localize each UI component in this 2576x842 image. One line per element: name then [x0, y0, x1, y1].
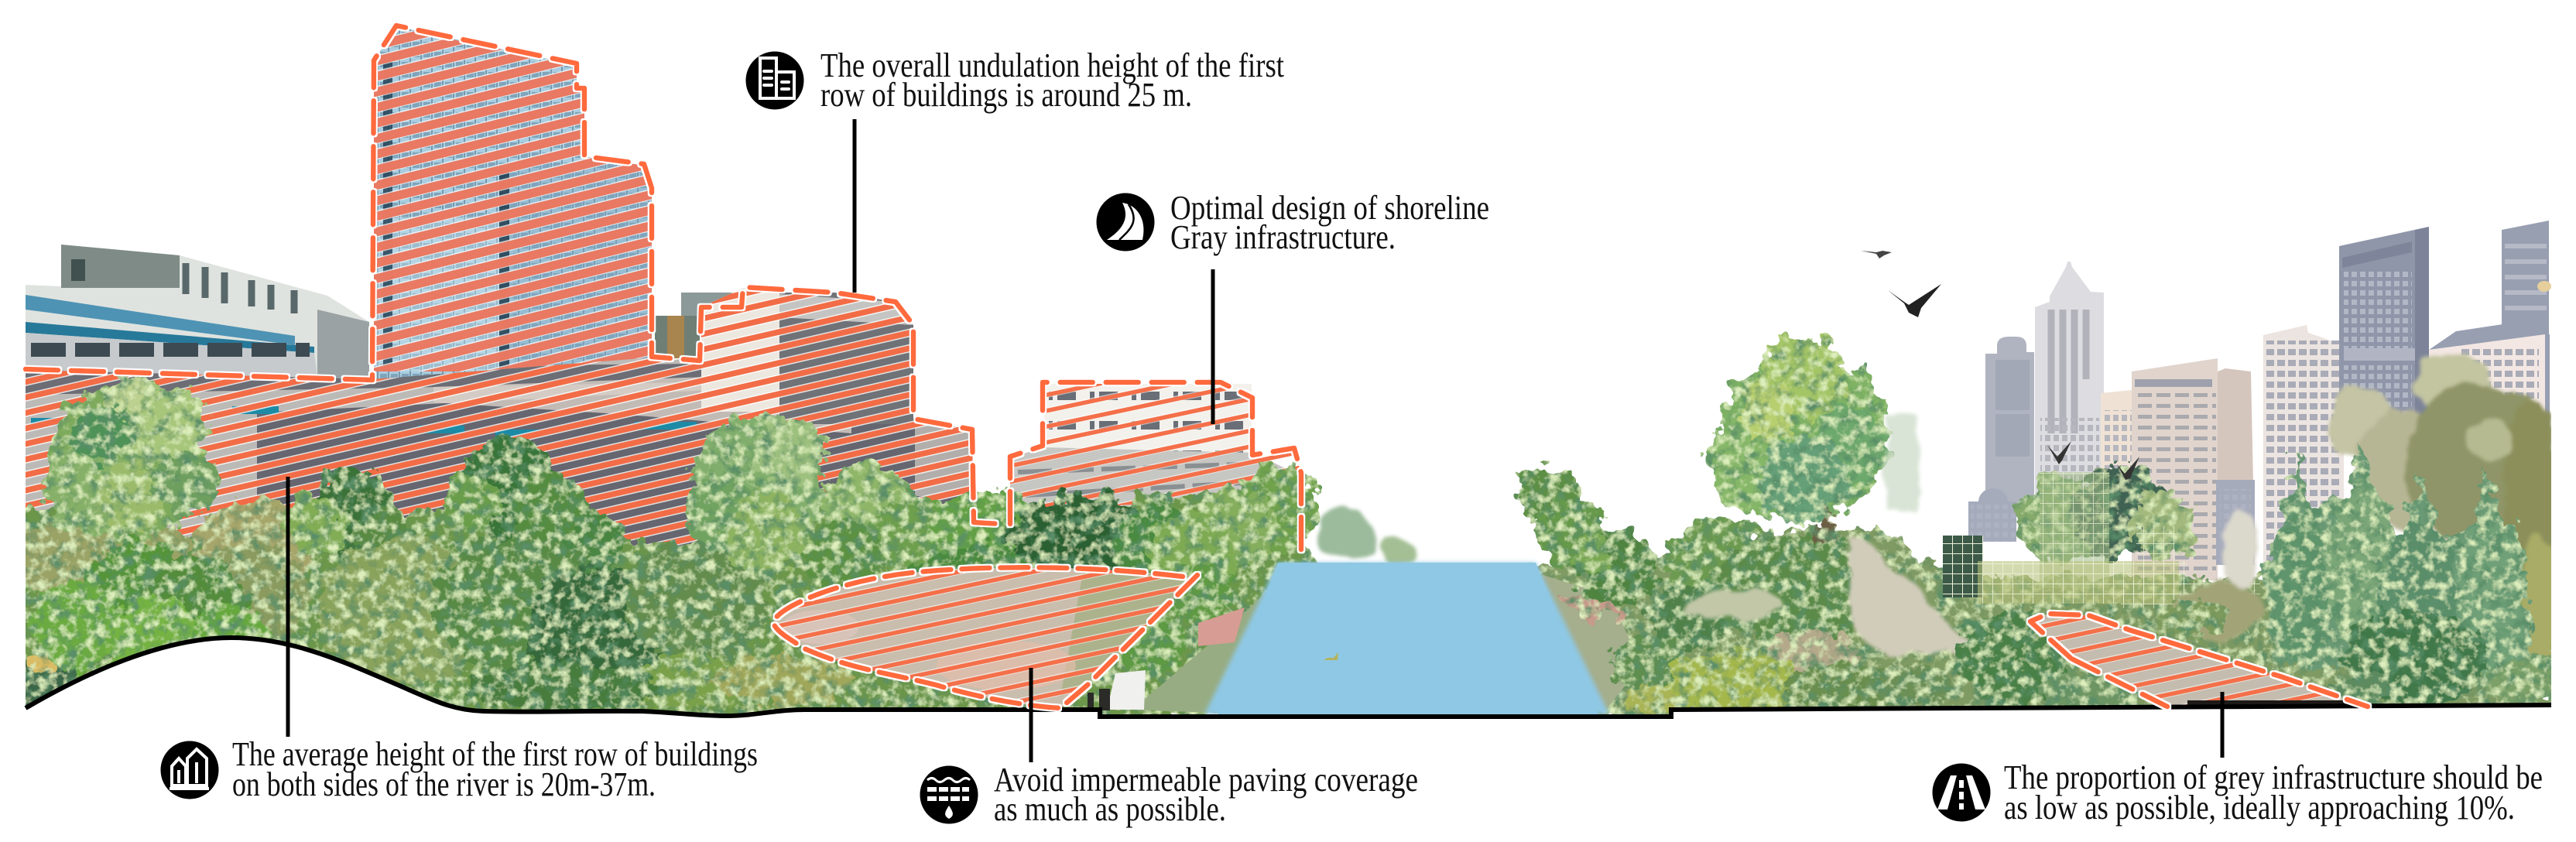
icon: bird in front of buildings 1 [2047, 441, 2071, 464]
text: shoreline line 2: Gray infrastructure. [1170, 218, 1396, 256]
building: beige slab [2132, 358, 2253, 580]
rock: pale blobs [2221, 512, 2261, 587]
right bank ground planting [1529, 526, 2551, 720]
small background building behind the tower [655, 293, 742, 358]
text: undulation height line 2: row of buildings is around 25 m. [820, 76, 1192, 114]
building: far right tower [2502, 221, 2549, 341]
tree: large tree [1707, 336, 1889, 546]
text: average height line 2: on both sides of the river is 20m-37m. [232, 765, 656, 803]
outline: paving [773, 567, 1198, 708]
building: white stepped tower [2263, 325, 2344, 565]
building: roofed block [2429, 317, 2550, 481]
icon: permeable paving [920, 766, 978, 823]
callout: undulation height [746, 46, 1284, 114]
icon: shoreline [1096, 193, 1155, 251]
bush: right bank planting [1613, 519, 1896, 717]
text: undulation height: The overall undulation height of the first [820, 46, 1284, 84]
river [1204, 563, 1609, 717]
text: shoreline: Optimal design of shoreline [1170, 189, 1489, 227]
left background building [26, 245, 369, 379]
tree: pale ghosted edge [1687, 351, 2562, 697]
tree: pine mass [2264, 445, 2533, 681]
text: impermeable paving: Avoid impermeable paving coverage [994, 761, 1418, 799]
text: impermeable paving line 2: as much as possible. [994, 790, 1226, 828]
paving area with hatch [773, 567, 1198, 710]
distant city skyline [1968, 221, 2551, 580]
tower with hatch [374, 29, 652, 379]
ground line [26, 638, 2551, 717]
bush: front lower left [17, 538, 271, 718]
icon: two buildings [161, 741, 218, 799]
icon: road [1932, 763, 1991, 822]
tree: olive canopy [2328, 351, 2562, 697]
callout: average height [161, 735, 758, 803]
bush: mid-right group [906, 486, 1181, 573]
callout: shoreline design [1096, 189, 1489, 256]
vegetation: right bank and city edge [1516, 336, 2562, 717]
tree: right bank trees [1516, 464, 1656, 608]
bank: grass and path [1110, 591, 1266, 714]
icon: office buildings [746, 51, 803, 110]
grey infrastructure road with hatch [2030, 614, 2368, 707]
building: gray slab left [1985, 337, 2034, 511]
tree: mid-left group [683, 416, 954, 596]
building: small gray block [2216, 480, 2255, 565]
icon: bird in front of buildings 2 [2117, 457, 2139, 480]
leader lines [288, 119, 2222, 762]
outline: road [2030, 614, 2368, 707]
tree: riverside trees [1118, 462, 1320, 675]
birds [1861, 251, 2139, 480]
building: dark slate tower [2339, 227, 2429, 435]
icon: tan blob [2537, 281, 2551, 292]
icon: large bird [1888, 284, 1941, 317]
dashed outlines of the hatch zones [26, 26, 2368, 708]
vegetation: riverside planting, left bank [8, 375, 1320, 720]
building: spired tower [2035, 262, 2104, 557]
tree: large left tree [45, 375, 218, 538]
far-side building with hatch [1010, 384, 1301, 515]
bank: right bank grass [1556, 596, 1625, 619]
building: peach rear [2101, 390, 2132, 542]
distant trees by the river [1317, 511, 1413, 566]
vegetation mass [15, 488, 1316, 720]
green-wall buildings [1943, 464, 2260, 608]
podium and riverside buildings with hatch [26, 286, 985, 565]
icon: people [1088, 689, 1110, 710]
outline: first-row buildings [26, 26, 1001, 524]
text: average height: The average height of the first row of buildings [232, 735, 758, 773]
building: domed block [1968, 488, 2016, 542]
tree: dark bushes [286, 438, 624, 570]
bush: front right shrubs [1865, 601, 2562, 714]
outline: far-side building [1010, 382, 1301, 559]
callout: grey infrastructure [1932, 758, 2543, 827]
callout: impermeable paving [920, 761, 1418, 828]
bush: mid planting [317, 534, 851, 714]
icon: small bird [1861, 251, 1892, 258]
